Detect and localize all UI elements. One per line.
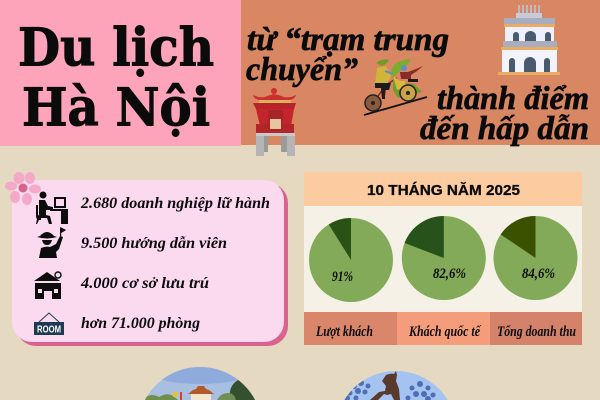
icon: tour guide bbox=[37, 227, 66, 258]
pie chart: visitors 91%: 91% bbox=[332, 269, 353, 285]
panel: 10 months 2025 charts bbox=[304, 172, 582, 345]
photo: bronze statue bbox=[344, 371, 448, 400]
icon: room sign bbox=[34, 313, 64, 336]
subtitle: to attractive destination: đến hấp dẫn bbox=[420, 111, 589, 147]
text: accommodations: 4.000 cơ sở lưu trú bbox=[80, 275, 209, 292]
title: Hà Nội bbox=[22, 78, 210, 138]
label: visitors: Lượt khách bbox=[315, 324, 373, 340]
pie chart: international visitors 82.6%: 82,6% bbox=[433, 266, 466, 282]
title bbox=[18, 18, 214, 138]
text: tour companies: 2.680 doanh nghiệp lữ hành bbox=[80, 195, 270, 212]
subtitle: to attractive destination bbox=[420, 81, 589, 147]
icon: office worker bbox=[36, 192, 68, 224]
label: total revenue: Tổng doanh thu bbox=[497, 324, 576, 340]
pie chart: total revenue 84.6%: 84,6% bbox=[522, 266, 555, 282]
title: Du lịch bbox=[18, 18, 214, 78]
pie chart: visitors 91% bbox=[309, 218, 393, 302]
icon: room sign: ROOM bbox=[37, 324, 61, 336]
subtitle: from transit stop bbox=[246, 22, 449, 88]
icon: flower bbox=[5, 172, 41, 205]
label: international visitors bbox=[397, 312, 490, 345]
icon: cyclo on slope bbox=[364, 59, 427, 115]
text: rooms: hơn 71.000 phòng bbox=[81, 315, 200, 332]
heading: 10 months of 2025: 10 THÁNG NĂM 2025 bbox=[367, 182, 520, 199]
pie chart: total revenue 84.6% bbox=[494, 216, 578, 300]
subtitle: from transit stop: từ “trạm trung bbox=[247, 22, 449, 58]
label: international visitors: Khách quốc tế bbox=[408, 324, 481, 340]
label: total revenue bbox=[490, 312, 582, 345]
panel: header bbox=[0, 0, 600, 156]
icon: Turtle Tower pavilion bbox=[498, 5, 560, 75]
text: tour guides: 9.500 hướng dẫn viên bbox=[81, 235, 227, 252]
subtitle: from transit stop: chuyển” bbox=[246, 52, 358, 88]
icon: temple gate bbox=[253, 88, 296, 156]
pie chart: international visitors 82.6% bbox=[402, 216, 486, 300]
subtitle: to attractive destination: thành điểm bbox=[437, 81, 589, 117]
panel: tourism stats card bbox=[5, 172, 288, 346]
icon: lodging house bbox=[34, 272, 61, 299]
photo: citadel gate bbox=[145, 367, 256, 400]
label: visitors bbox=[304, 312, 397, 345]
